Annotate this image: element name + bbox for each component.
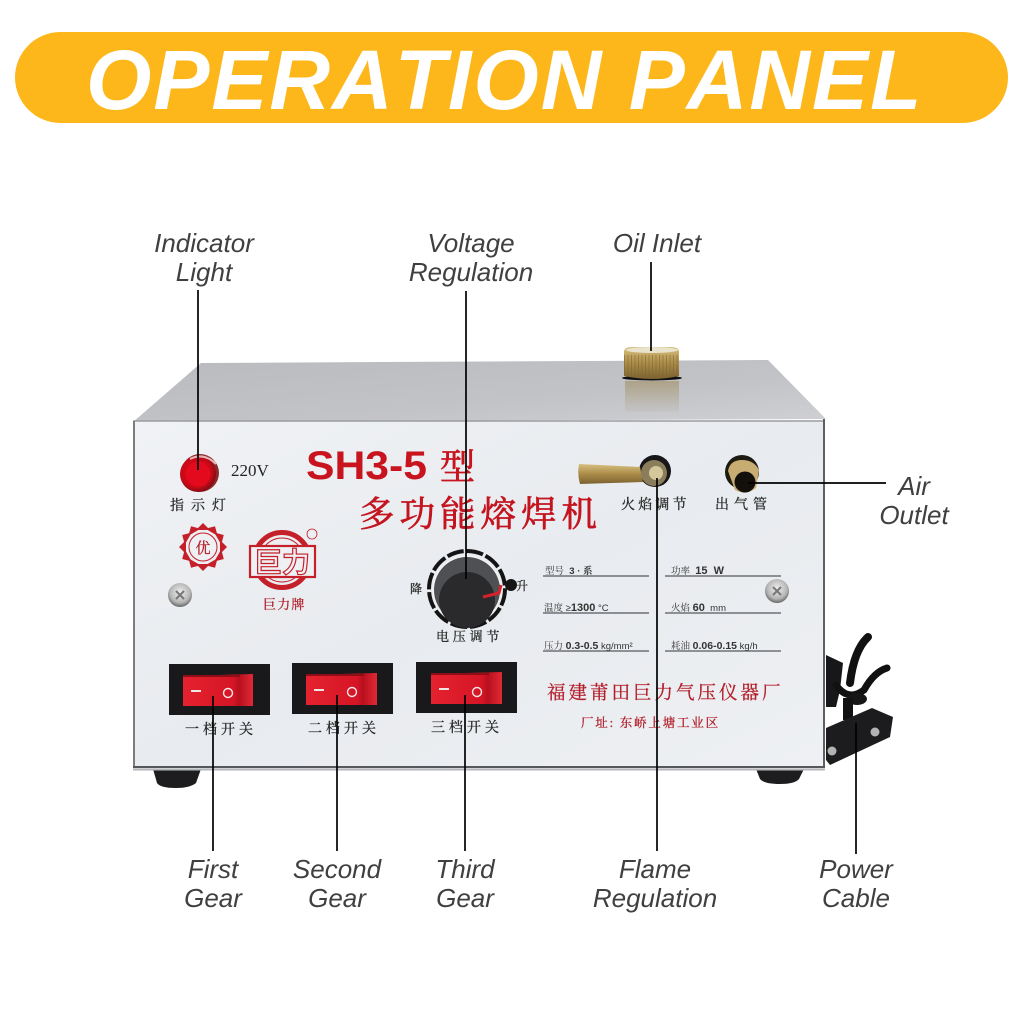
leader line: flame regulation xyxy=(656,478,658,851)
indicator light xyxy=(180,454,219,492)
label: indicator light xyxy=(154,228,255,470)
label: flame regulation: Regulation xyxy=(593,883,717,913)
spec: model: 型号 3 · 系 xyxy=(545,565,593,577)
rubber foot right xyxy=(756,769,804,784)
label: first gear xyxy=(184,696,243,913)
manufacturer address: 厂址: 东峤上塘工业区 xyxy=(581,715,720,730)
leader line: indicator light xyxy=(197,290,199,470)
label: first gear: First xyxy=(188,854,240,884)
label: second gear xyxy=(293,695,383,913)
label: third gear: Third xyxy=(435,854,496,884)
brand logo xyxy=(250,529,317,588)
leader line: voltage regulation xyxy=(465,291,467,579)
brand caption: 巨力牌 xyxy=(263,597,306,612)
quality badge xyxy=(179,523,227,571)
label: air outlet: Outlet xyxy=(879,500,950,530)
dial caption: 电压调节 xyxy=(436,629,503,644)
label: third gear: Gear xyxy=(436,883,495,913)
label: first gear: Gear xyxy=(184,883,243,913)
model heading: SH3-5 xyxy=(306,444,427,488)
title banner xyxy=(15,32,1008,127)
leader line: second gear xyxy=(336,695,338,851)
spec: temperature: 温度 ≥1300 °C xyxy=(544,602,609,614)
label: indicator light: Light xyxy=(176,257,234,287)
label: flame regulation xyxy=(593,478,717,913)
quality badge: 优 xyxy=(195,540,211,557)
label: power cable: Cable xyxy=(822,883,890,913)
spec: power: 功率 15 W xyxy=(671,565,725,577)
screw right xyxy=(765,579,789,603)
switch 2 xyxy=(292,663,393,714)
switch 3 xyxy=(416,662,517,713)
front panel xyxy=(133,419,825,770)
leader line: air outlet xyxy=(748,482,886,484)
label: power cable: Power xyxy=(819,854,894,884)
label: power cable xyxy=(819,723,894,913)
specification table xyxy=(543,565,781,652)
air outlet caption: 出气管 xyxy=(715,497,772,513)
power cable and plug xyxy=(826,637,893,765)
title: OPERATION PANEL xyxy=(86,33,923,127)
leader line: first gear xyxy=(212,696,214,851)
label: oil inlet xyxy=(613,228,703,351)
label: flame regulation: Flame xyxy=(619,854,691,884)
leader line: third gear xyxy=(464,695,466,851)
switch 2 caption: 二档开关 xyxy=(308,720,380,737)
screw left xyxy=(168,583,192,607)
dial high label: 升 xyxy=(516,578,528,593)
flame regulation valve xyxy=(578,455,671,487)
top cover xyxy=(133,360,826,422)
label: indicator light: Indicator xyxy=(154,228,255,258)
dial low label: 降 xyxy=(410,582,422,596)
label: second gear: Gear xyxy=(308,883,367,913)
air outlet nozzle xyxy=(725,455,759,493)
flame regulation caption: 火焰调节 xyxy=(621,496,690,513)
device: welding machine xyxy=(133,347,893,788)
model heading suffix: 型 xyxy=(440,448,475,487)
spec: flame: 火焰 60 mm xyxy=(671,602,726,614)
switch 1 xyxy=(169,664,270,715)
voltage label 220V: 220V xyxy=(231,461,270,480)
spec: oil use: 耗油 0.06-0.15 kg/h xyxy=(671,640,758,652)
label: air outlet: Air xyxy=(896,471,931,501)
indicator light caption: 指示灯 xyxy=(170,497,233,514)
leader line: oil inlet xyxy=(650,262,652,351)
label: voltage regulation xyxy=(409,228,533,579)
brand logo: 巨力 xyxy=(254,547,310,578)
rubber foot left xyxy=(153,769,201,788)
label: oil inlet: Oil Inlet xyxy=(613,228,703,258)
manufacturer name: 福建莆田巨力气压仪器厂 xyxy=(547,683,784,704)
oil inlet knob xyxy=(622,347,682,412)
label: second gear: Second xyxy=(293,854,383,884)
spec: pressure: 压力 0.3-0.5 kg/mm² xyxy=(544,640,633,652)
leader line: power cable xyxy=(855,723,857,854)
machine name: 多功能熔焊机 xyxy=(359,494,602,534)
label: voltage regulation: Regulation xyxy=(409,257,533,287)
switch 1 caption: 一档开关 xyxy=(185,721,257,738)
switch 3 caption: 三档开关 xyxy=(431,719,503,736)
label: air outlet xyxy=(748,471,950,530)
label: voltage regulation: Voltage xyxy=(427,228,515,258)
label: third gear xyxy=(435,695,496,913)
voltage dial xyxy=(429,551,517,628)
